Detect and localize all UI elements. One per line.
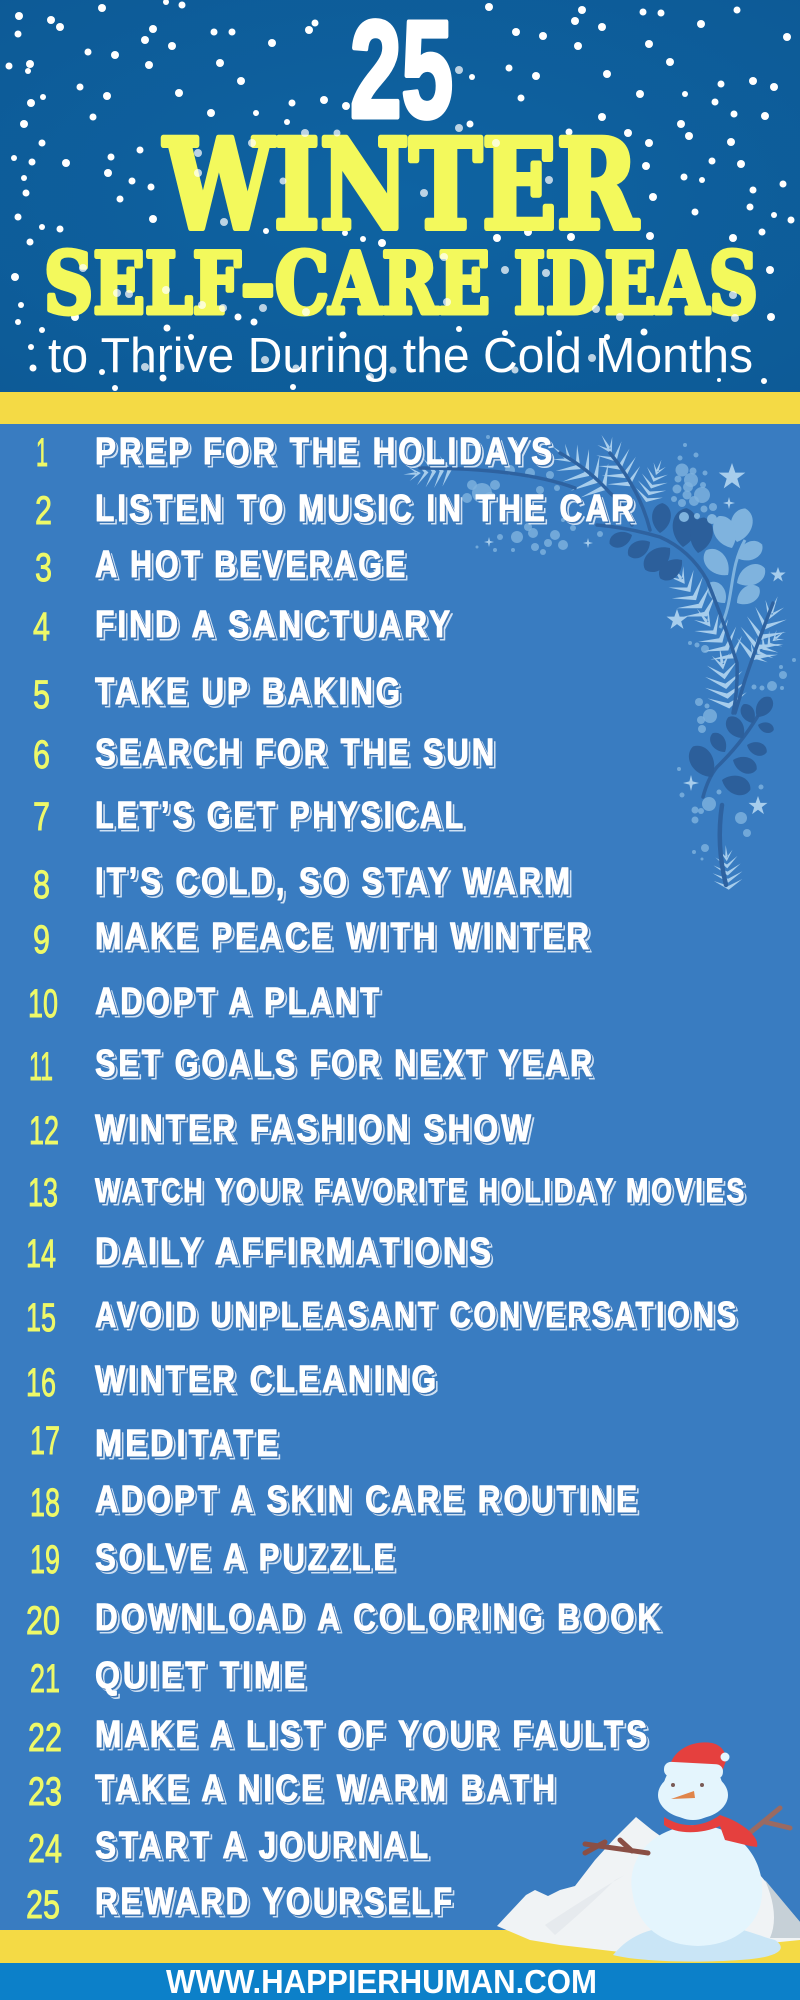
item 6: SEARCH FOR THE SUN xyxy=(95,732,497,774)
item 24: 24 xyxy=(28,1827,62,1871)
item 3: 3 xyxy=(35,546,52,590)
item 21: QUIET TIME xyxy=(95,1655,308,1697)
item 21: 21 xyxy=(30,1657,60,1701)
footer url: WWW.HAPPIERHUMAN.COM xyxy=(166,1963,597,2000)
item 13: 13 xyxy=(28,1171,58,1215)
item 10 xyxy=(28,981,382,1026)
item 1: PREP FOR THE HOLIDAYS xyxy=(95,431,555,473)
item 16: WINTER CLEANING xyxy=(95,1359,439,1401)
item 6 xyxy=(33,732,497,777)
item 25: 25 xyxy=(26,1883,60,1927)
item 9: MAKE PEACE WITH WINTER xyxy=(95,916,592,958)
item 9: 9 xyxy=(33,918,50,962)
item 8: 8 xyxy=(33,863,50,907)
eyes and carrot nose xyxy=(671,1783,704,1799)
item 19: 19 xyxy=(30,1538,60,1582)
falling snow dots xyxy=(6,0,794,391)
subtitle: to Thrive During the Cold Months xyxy=(48,329,753,383)
hat brim xyxy=(664,1761,723,1780)
item 12: 12 xyxy=(29,1109,59,1153)
item 10: ADOPT A PLANT xyxy=(95,981,382,1023)
item 17 xyxy=(30,1419,281,1465)
santa hat xyxy=(670,1742,727,1772)
item 11: SET GOALS FOR NEXT YEAR xyxy=(95,1043,595,1085)
item 20 xyxy=(26,1597,663,1643)
item 11 xyxy=(29,1043,595,1089)
snowman head xyxy=(658,1760,728,1820)
item 25 xyxy=(26,1881,455,1927)
winter foliage wreath xyxy=(402,426,799,891)
item 24: START A JOURNAL xyxy=(95,1825,431,1867)
snow dots over title xyxy=(79,66,739,381)
item 20: DOWNLOAD A COLORING BOOK xyxy=(95,1597,663,1639)
main list background xyxy=(0,424,800,1930)
berries on dark leaves xyxy=(679,512,717,524)
berry clusters xyxy=(462,435,796,860)
snowman right arm xyxy=(735,1808,790,1845)
meltwater puddle xyxy=(613,1925,781,1962)
item 24 xyxy=(28,1825,431,1871)
item 11: 11 xyxy=(29,1045,53,1089)
snow mountains xyxy=(497,1817,800,1952)
item 4: 4 xyxy=(33,605,50,649)
item 12: WINTER FASHION SHOW xyxy=(95,1108,534,1150)
item 2: LISTEN TO MUSIC IN THE CAR xyxy=(95,488,637,530)
footer band xyxy=(0,1963,800,2000)
snowman body xyxy=(631,1825,762,1946)
item 4 xyxy=(33,604,453,649)
item 22: 22 xyxy=(28,1716,62,1760)
item 17: MEDITATE xyxy=(95,1423,281,1465)
small stars xyxy=(484,463,786,814)
item 7: LET’S GET PHYSICAL xyxy=(95,795,466,837)
red scarf xyxy=(664,1815,757,1847)
header panel xyxy=(0,0,800,392)
item 20: 20 xyxy=(26,1599,60,1643)
snowman left arm xyxy=(585,1840,648,1853)
item 2: 2 xyxy=(35,489,52,533)
item 16: 16 xyxy=(26,1361,56,1405)
item 17: 17 xyxy=(30,1419,60,1463)
item 21 xyxy=(30,1655,308,1701)
bottom yellow band xyxy=(0,1930,800,1963)
item 15: 15 xyxy=(26,1296,56,1340)
item 19: SOLVE A PUZZLE xyxy=(95,1537,397,1579)
item 9 xyxy=(33,916,592,962)
item 3: A HOT BEVERAGE xyxy=(95,544,408,586)
item 1: 1 xyxy=(36,431,48,475)
item 8: IT’S COLD, SO STAY WARM xyxy=(95,861,573,903)
item 23: TAKE A NICE WARM BATH xyxy=(95,1768,558,1810)
item 3 xyxy=(35,544,408,590)
item 6: 6 xyxy=(33,733,50,777)
item 7 xyxy=(33,795,466,839)
item 19 xyxy=(30,1537,397,1582)
item 4: FIND A SANCTUARY xyxy=(95,604,453,646)
item 23: 23 xyxy=(28,1770,62,1814)
hat pompom xyxy=(720,1752,730,1762)
dark stems xyxy=(420,453,773,885)
pine fronds xyxy=(402,426,799,891)
item 23 xyxy=(28,1768,558,1814)
item 18 xyxy=(30,1479,640,1525)
item 5: TAKE UP BAKING xyxy=(95,671,403,713)
dark leaves xyxy=(607,502,777,799)
item 10: 10 xyxy=(28,982,58,1026)
item 7: 7 xyxy=(33,795,50,839)
item 18: ADOPT A SKIN CARE ROUTINE xyxy=(95,1479,640,1521)
item 22 xyxy=(28,1714,650,1760)
item 18: 18 xyxy=(30,1481,60,1525)
item 5 xyxy=(33,671,403,717)
title WINTER: WINTER xyxy=(162,113,639,258)
snowman on snowy mountain xyxy=(497,1742,800,1962)
item 22: MAKE A LIST OF YOUR FAULTS xyxy=(95,1714,650,1756)
item 16 xyxy=(26,1359,439,1405)
top yellow band xyxy=(0,392,800,424)
light leafy branch xyxy=(698,506,769,628)
list numbers and ideas xyxy=(26,431,747,1927)
item 8 xyxy=(33,861,573,907)
item 25: REWARD YOURSELF xyxy=(95,1881,455,1923)
item 14: DAILY AFFIRMATIONS xyxy=(95,1231,494,1273)
item 14: 14 xyxy=(26,1232,56,1276)
item 5: 5 xyxy=(33,673,50,717)
